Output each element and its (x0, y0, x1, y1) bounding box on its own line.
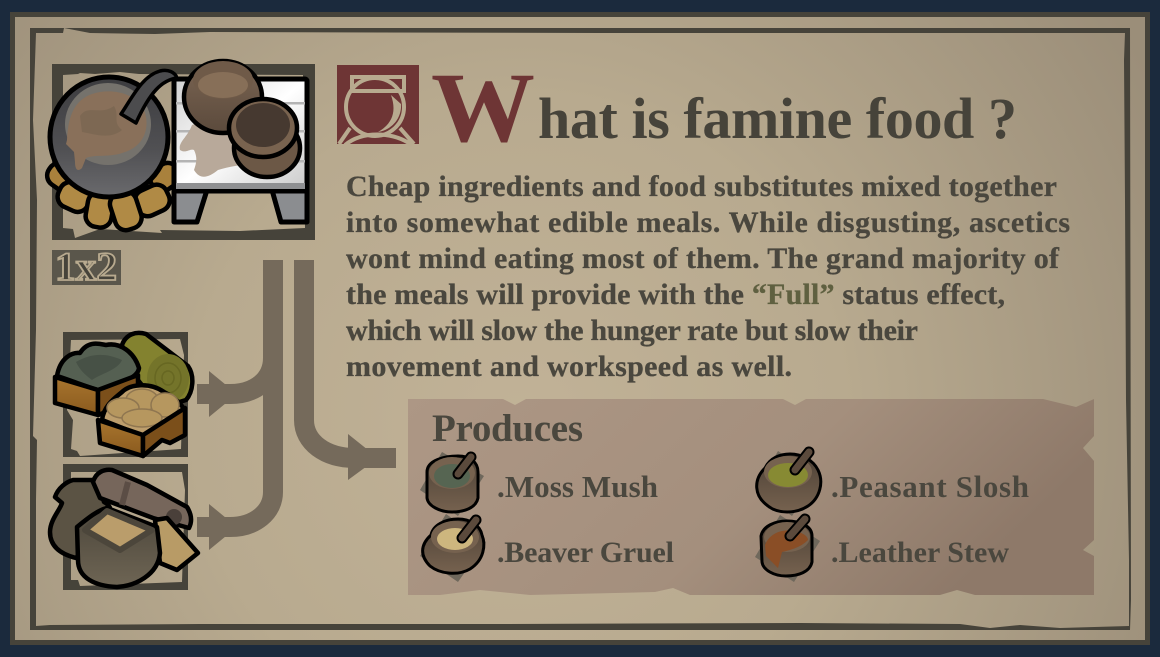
panel background (408, 399, 1094, 595)
icon: back sack (50, 480, 111, 558)
description text: the meals will provide with the “Full” status effect, (346, 278, 1005, 311)
item: peasant slosh (756, 451, 1029, 516)
icon: table (174, 79, 307, 222)
item: moss mush (420, 452, 658, 516)
title: W (431, 52, 535, 163)
description text (346, 170, 1070, 383)
icon: hay roll (122, 333, 192, 408)
icon: cauldron (50, 70, 177, 197)
item frame (52, 64, 315, 240)
icon: title emblem (337, 65, 419, 145)
title: hat is famine food ? (538, 86, 1017, 151)
table stain (180, 118, 262, 177)
item: moss mush: .Moss Mush (497, 469, 658, 504)
icon: rolled leather (93, 470, 191, 528)
frame (63, 464, 188, 590)
title (431, 52, 1017, 163)
icon: front sack (77, 508, 160, 587)
item: beaver gruel: .Beaver Gruel (497, 536, 674, 569)
panel: ingredients top (55, 332, 192, 457)
description text: into somewhat edible meals. While disgusting, ascetics (346, 206, 1070, 239)
illustration: cauldron and table (43, 61, 315, 240)
panel: ingredients bottom (50, 464, 198, 590)
description text: movement and workspeed as well. (346, 350, 792, 383)
item: leather stew (755, 515, 1009, 582)
item: leather stew: .Leather Stew (831, 536, 1009, 569)
item: beaver gruel (420, 514, 674, 582)
size badge: 1x2 (55, 244, 117, 289)
icon: bowls (184, 61, 300, 177)
icon: grain pile (155, 518, 198, 570)
item: peasant slosh: .Peasant Slosh (831, 469, 1029, 504)
arrow: ingredients to station (197, 260, 273, 550)
frame (63, 332, 188, 457)
arrow: station to produces (304, 260, 396, 480)
icon: nut crate (98, 385, 185, 456)
icon: firewood logs (43, 159, 184, 233)
icon: moss crate (55, 344, 139, 415)
description text: wont mind eating most of them. The grand majority of (346, 242, 1060, 275)
heading: produces: Produces (432, 407, 583, 450)
ladle (121, 70, 177, 123)
panel: produces (408, 399, 1094, 595)
description text: which will slow the hunger rate but slow their (346, 314, 918, 347)
description text: Cheap ingredients and food substitutes mixed together (346, 170, 1057, 203)
